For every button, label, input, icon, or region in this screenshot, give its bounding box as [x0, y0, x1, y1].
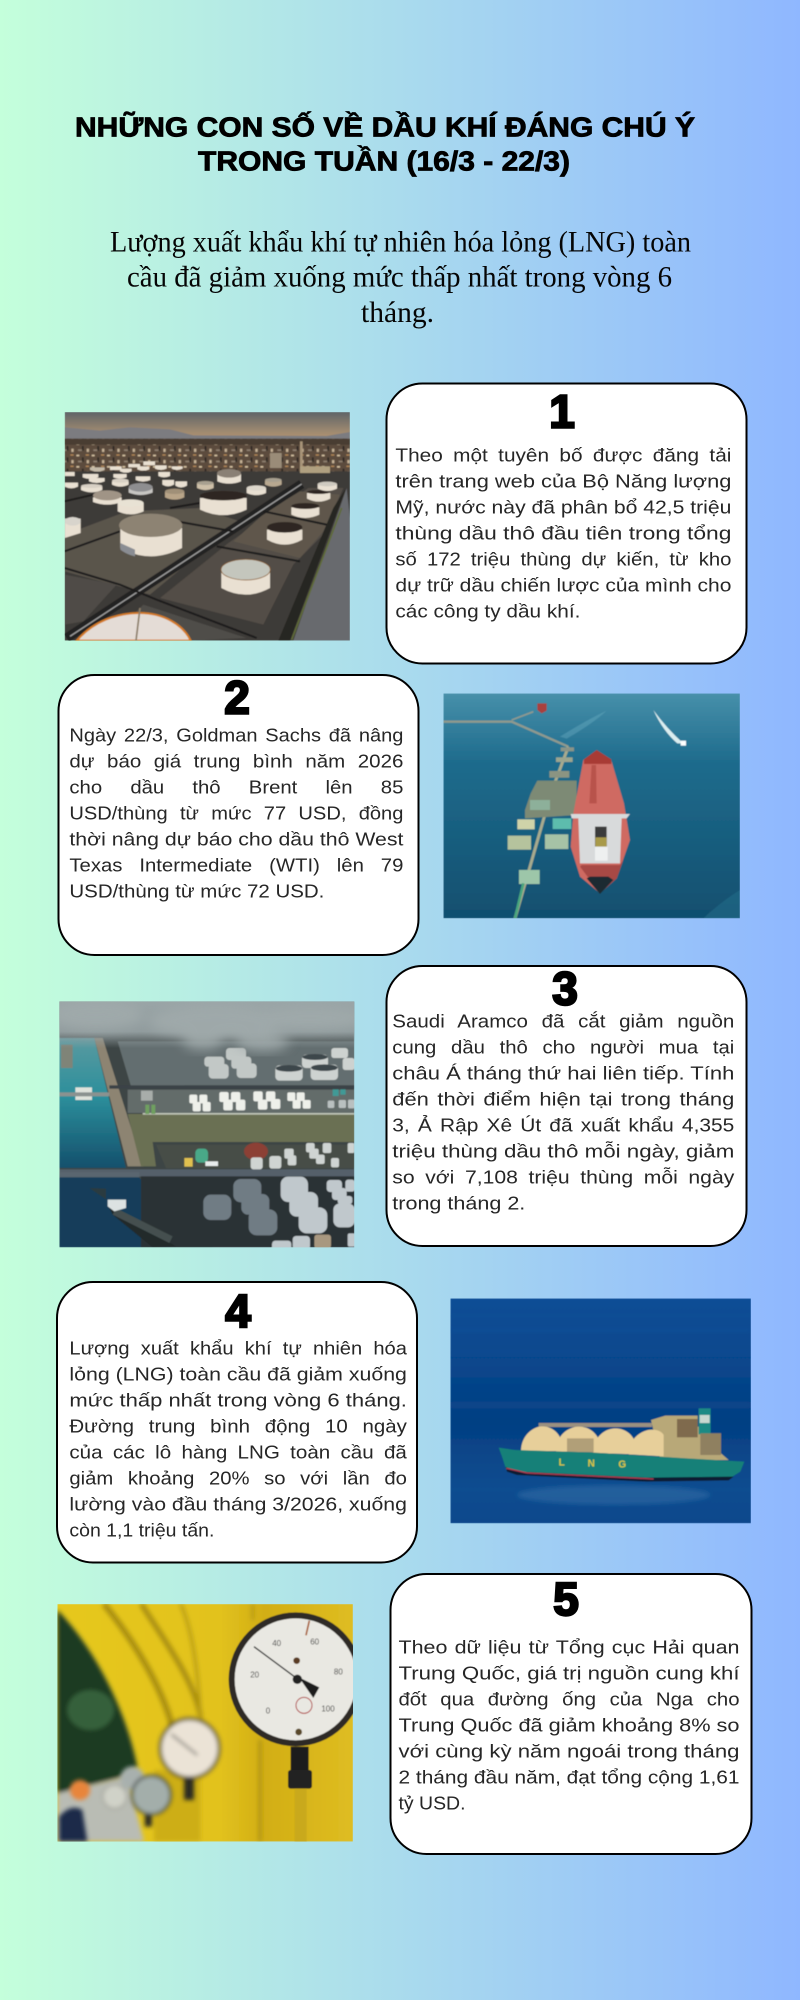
- worker: [59, 1780, 90, 1842]
- title: [75, 111, 695, 176]
- card 5 text: đốt qua đường ống của Nga cho: [398, 1689, 740, 1709]
- card 5 text: Trung Quốc đã giảm khoảng 8% so: [398, 1715, 740, 1735]
- jetty: [443, 712, 568, 918]
- storage tanks: [65, 461, 337, 595]
- photo: pressure gauges and yellow pipes: 20: [250, 1671, 260, 1680]
- domes: [521, 1426, 664, 1456]
- card 5 text: [398, 1637, 740, 1813]
- card 4 text: [69, 1338, 408, 1540]
- card 5 text: Trung Quốc, giá trị nguồn cung khí: [398, 1663, 740, 1683]
- card 2 text: [69, 726, 403, 902]
- card 3 text: [392, 1010, 734, 1213]
- card 4 text: của các lô hàng LNG toàn cầu đã: [69, 1442, 408, 1462]
- moored ship: [110, 1208, 174, 1247]
- card 3: [386, 962, 746, 1246]
- fog: [49, 1000, 369, 1051]
- tanker: [571, 751, 630, 893]
- card 1 text: [395, 446, 731, 622]
- card 3 text: 3, Ả Rập Xê Út đã xuất khẩu 4,355: [392, 1114, 734, 1135]
- card 3 text: cung dầu thô cho người mua tại: [392, 1037, 734, 1057]
- photo: refinery on coast under fog: [49, 1000, 369, 1251]
- number 5: 5: [553, 1573, 579, 1625]
- subtitle: [110, 225, 691, 329]
- card 4 text: Lượng xuất khẩu khí tự nhiên hóa: [69, 1338, 408, 1358]
- card 2 text: USD/thùng từ mức 72 USD.: [69, 882, 324, 902]
- upper tanks: [204, 1048, 257, 1079]
- photo: pressure gauges and yellow pipes: 0: [266, 1706, 271, 1715]
- card 1 text: các công ty dầu khí.: [395, 602, 580, 622]
- photo: oil storage tanks at sunset: [65, 412, 350, 641]
- card 3 text: trong tháng 2.: [392, 1193, 525, 1213]
- card 5 text: tỷ USD.: [398, 1793, 466, 1813]
- card 4 text: giảm khoảng 20% so với lần đo: [69, 1468, 407, 1488]
- card 1: [386, 384, 746, 664]
- photo: pressure gauges and yellow pipes: 100: [321, 1704, 335, 1713]
- card 4 text: lường vào đầu tháng 3/2026, xuống: [69, 1494, 407, 1514]
- main gauge: [291, 1747, 309, 1773]
- superstructure: [651, 1416, 729, 1460]
- number 1: 1: [549, 386, 575, 438]
- card 2 panel: [58, 675, 418, 955]
- number 3: 3: [552, 962, 578, 1014]
- big tanks: [203, 1179, 277, 1235]
- card 1 text: dự trữ dầu chiến lược của mình cho: [395, 576, 731, 596]
- photo: pressure gauges and yellow pipes: 60: [310, 1637, 320, 1646]
- photo: LNG carrier at sea: G: [618, 1460, 626, 1471]
- card 3 panel: [386, 966, 746, 1246]
- card 2 text: thời nâng dự báo cho dầu thô West: [69, 830, 403, 850]
- card 4 text: lỏng (LNG) toàn cầu đã giảm xuống: [69, 1364, 407, 1384]
- card 5: [390, 1573, 752, 1854]
- card 2 text: dự báo giá trung bình năm 2026: [69, 752, 403, 772]
- card 4: [57, 1282, 417, 1562]
- photo: pressure gauges and yellow pipes: 80: [334, 1667, 343, 1676]
- card 4 text: Đường trung bình động 10 ngày: [69, 1416, 407, 1436]
- card 3 text: triệu thùng dầu thô mỗi ngày, giảm: [392, 1140, 734, 1161]
- photo: LNG carrier at sea: [450, 1298, 751, 1523]
- number 2: 2: [224, 672, 250, 724]
- photo: tanker at offshore jetty: [443, 693, 740, 918]
- card 2 text: USD/thùng từ mức 77 USD, đồng: [69, 804, 403, 824]
- title: TRONG TUẦN (16/3 - 22/3): [198, 145, 570, 176]
- card 5 panel: [390, 1574, 752, 1854]
- card 2 text: cho dầu thô Brent lên 85: [69, 778, 403, 798]
- card 4 text: mức thấp nhất trong vòng 6 tháng.: [69, 1390, 407, 1410]
- card 1 text: số 172 triệu thùng dự kiến, từ kho: [395, 550, 731, 570]
- card 5 text: Theo dữ liệu từ Tổng cục Hải quan: [398, 1637, 740, 1657]
- card 3 text: đến thời điểm hiện tại trong tháng: [392, 1089, 734, 1109]
- subtitle: Lượng xuất khẩu khí tự nhiên hóa lỏng (LNG) toàn: [110, 225, 691, 258]
- card 2 text: Texas Intermediate (WTI) lên 79: [69, 856, 403, 876]
- card 5 text: 2 tháng đầu năm, đạt tổng cộng 1,61: [398, 1767, 740, 1787]
- card 3 text: Saudi Aramco đã cắt giảm nguồn: [392, 1010, 734, 1031]
- dark foliage: [57, 1610, 137, 1793]
- photo: pressure gauges and yellow pipes: 40: [272, 1639, 282, 1648]
- subtitle: tháng.: [361, 296, 434, 329]
- card 1 text: thùng dầu thô đầu tiên trong tổng: [395, 524, 731, 544]
- photo: LNG carrier at sea: N: [588, 1458, 595, 1469]
- card 1 panel: [386, 384, 746, 664]
- number 4: 4: [225, 1285, 251, 1337]
- card 3 text: so với 7,108 triệu thùng mỗi ngày: [392, 1166, 734, 1187]
- card 2 text: Ngày 22/3, Goldman Sachs đã nâng: [69, 726, 403, 746]
- card 1 text: trên trang web của Bộ Năng lượng: [395, 472, 731, 492]
- title: NHỮNG CON SỐ VỀ DẦU KHÍ ĐÁNG CHÚ Ý: [75, 111, 695, 143]
- card 4 panel: [57, 1282, 417, 1562]
- card 1 text: Theo một tuyên bố được đăng tải: [395, 446, 731, 466]
- card 4 text: còn 1,1 triệu tấn.: [69, 1520, 214, 1540]
- hull: [499, 1448, 744, 1480]
- card 5 text: với cùng kỳ năm ngoái trong tháng: [398, 1741, 740, 1761]
- background gauges: [103, 1719, 219, 1827]
- card 1 text: Mỹ, nước này đã phân bổ 42,5 triệu: [395, 498, 731, 518]
- tank clusters: [189, 1091, 311, 1111]
- card 2: [58, 672, 418, 955]
- subtitle: cầu đã giảm xuống mức thấp nhất trong vòng 6: [127, 261, 672, 294]
- photo: pressure gauges and yellow pipes: [57, 1604, 360, 1842]
- photo: LNG carrier at sea: L: [559, 1458, 565, 1469]
- card 3 text: châu Á tháng thứ hai liên tiếp. Tính: [392, 1063, 734, 1083]
- lower block: [244, 1143, 268, 1160]
